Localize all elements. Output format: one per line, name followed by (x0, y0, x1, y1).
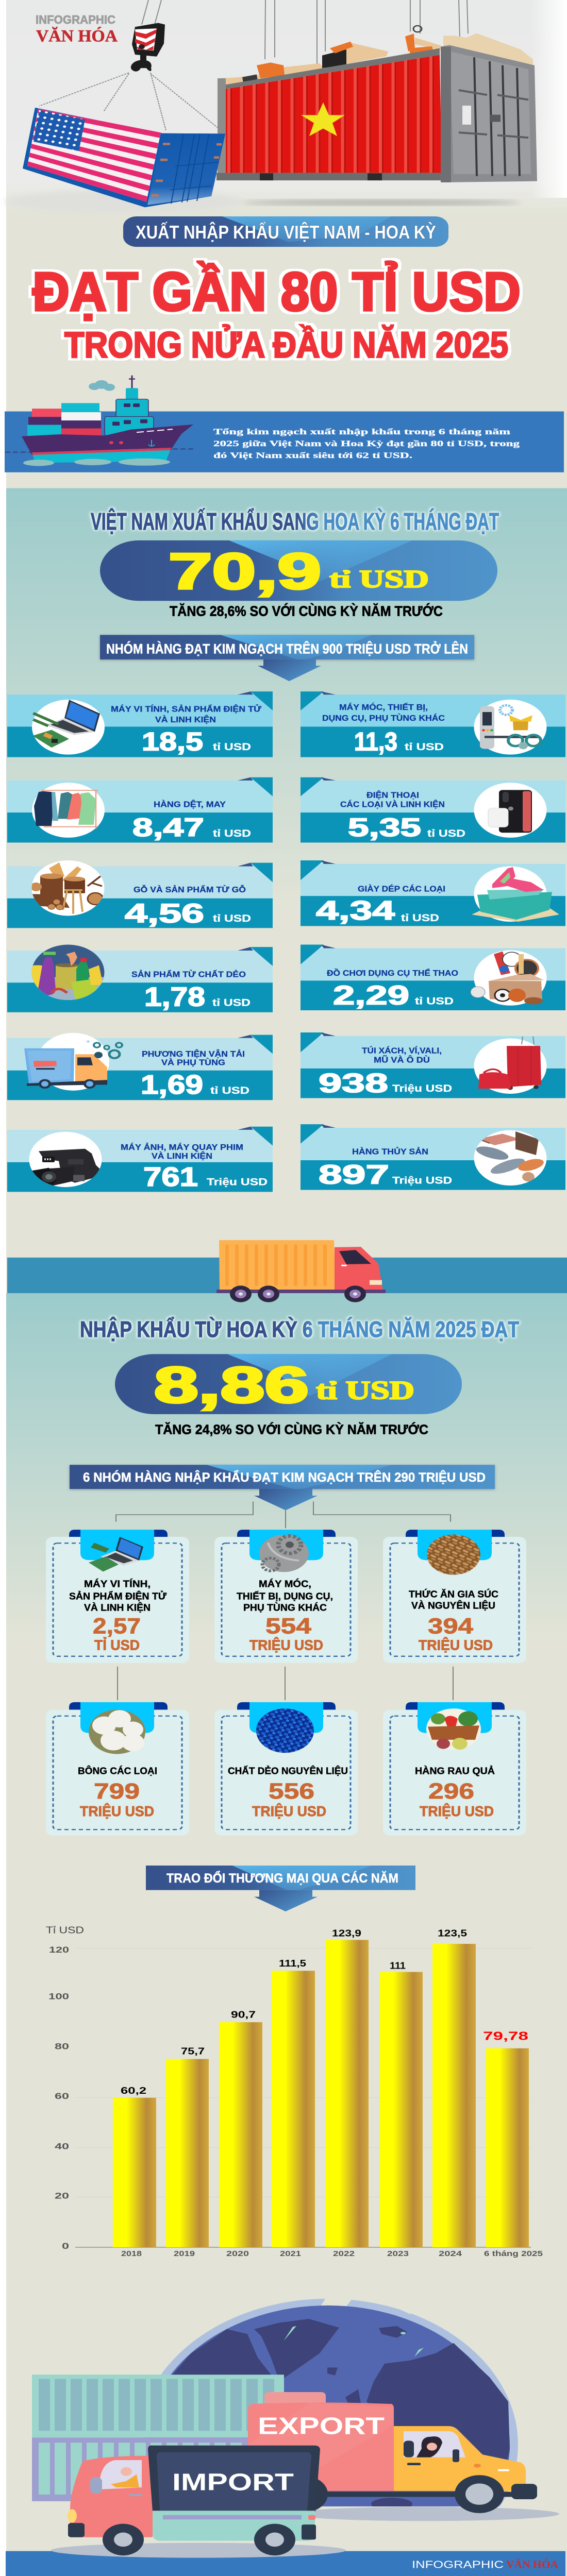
icon: feed pellets (427, 1534, 480, 1575)
callout: 70,9 tỉ USD: 70,9 (169, 544, 321, 600)
value: tỉ USD (210, 1085, 249, 1096)
label: HÀNG RAU QUẢ (415, 1765, 495, 1776)
icon: clothes rack (34, 790, 98, 829)
label: MÁY ẢNH, MÁY QUAY PHIM (121, 1142, 243, 1151)
y axis labels: 120 (49, 1945, 69, 1955)
bar values: 75,7 (181, 2046, 205, 2057)
bars (113, 1940, 529, 2247)
label: MÁY MÓC, THIẾT BỊ, (339, 703, 428, 712)
card: wood (7, 860, 273, 928)
value: 799 (94, 1778, 140, 1804)
label: THỨC ĂN GIA SÚC (409, 1588, 498, 1600)
card: phones (301, 777, 565, 842)
illustration: import truck (51, 2446, 346, 2558)
value: Triệu USD (392, 1175, 452, 1186)
value (252, 1778, 326, 1819)
x axis labels: 6 tháng 2025 (484, 2249, 543, 2258)
x axis labels: 2019 (174, 2249, 195, 2258)
bar values: 111,5 (279, 1958, 306, 1969)
x axis labels: 2023 (387, 2249, 409, 2258)
footer band (6, 2551, 565, 2576)
x axis labels: 2020 (226, 2249, 249, 2258)
banner: trade over the years (146, 1866, 415, 1911)
value (144, 981, 251, 1012)
bar values: 60,2 (121, 2086, 146, 2096)
value: 938 (319, 1068, 388, 1098)
icon: cotton (89, 1709, 145, 1754)
label: THIẾT BỊ, DỤNG CỤ, (237, 1590, 333, 1602)
card: plastics (7, 945, 273, 1012)
growth note: imports: TĂNG 24,8% SO VỚI CÙNG KỲ NĂM TRƯỚC (155, 1422, 428, 1437)
value: TỈ USD (94, 1637, 140, 1653)
label: MÁY MÓC, (259, 1578, 311, 1589)
connector lines (116, 1502, 453, 1700)
import card: machinery (214, 1530, 358, 1663)
value: tỉ USD (401, 912, 439, 924)
value: 394 (428, 1614, 473, 1638)
label: PHỤ TÙNG KHÁC (243, 1602, 327, 1613)
x axis labels (121, 2249, 543, 2258)
intro banner (5, 412, 564, 472)
value (132, 814, 251, 842)
label: TÚI XÁCH, VÍ,VALI, (362, 1046, 442, 1055)
card: textiles (7, 777, 273, 842)
intro text: đó Việt Nam xuất siêu tới 62 tỉ USD. (213, 451, 412, 460)
illustration: import truck: IMPORT (172, 2469, 294, 2496)
label (121, 1142, 243, 1160)
label: GIÀY DÉP CÁC LOẠI (358, 884, 445, 893)
growth note: exports: TĂNG 28,6% SO VỚI CÙNG KỲ NĂM TRƯỚC (170, 603, 443, 619)
label: VÀ NGUYÊN LIỆU (411, 1600, 495, 1611)
icon: cargo truck (216, 1240, 386, 1302)
icon: wood logs (30, 862, 103, 914)
value: tỉ USD (213, 741, 251, 752)
value: tỉ USD (213, 913, 251, 924)
label (340, 790, 445, 809)
label (409, 1588, 498, 1611)
intro text: 2025 giữa Việt Nam và Hoa Kỳ đạt gần 80 tỉ USD, trong (213, 439, 520, 448)
value (125, 898, 251, 928)
value: 4,56 (125, 898, 204, 928)
label (111, 704, 261, 724)
label: MÁY VI TÍNH, SẢN PHẨM ĐIỆN TỬ (111, 704, 261, 714)
icon: plastic bottles (31, 945, 106, 1001)
value (80, 1778, 154, 1819)
value: tỉ USD (427, 828, 465, 839)
y axis labels: 80 (55, 2042, 69, 2052)
bar values: 123,9 (332, 1928, 361, 1939)
label (362, 1046, 442, 1064)
value: Triệu USD (207, 1176, 268, 1188)
value: 556 (269, 1778, 314, 1804)
value (319, 1068, 452, 1098)
label: CÁC LOẠI VÀ LINH KIỆN (340, 800, 445, 809)
label: VÀ PHỤ TÙNG (161, 1058, 225, 1067)
value (348, 814, 465, 842)
value: TRIỆU USD (80, 1803, 154, 1819)
bar chart (46, 1925, 543, 2258)
value: TRIỆU USD (252, 1803, 326, 1819)
label: HÀNG THỦY SẢN (352, 1147, 428, 1156)
illustration: container stack (32, 2375, 284, 2501)
bar chart: Tỉ USD (46, 1925, 84, 1936)
card: toys and sports (301, 945, 565, 1010)
label (237, 1578, 333, 1613)
bar values: 111 (390, 1960, 406, 1971)
value (143, 1162, 268, 1192)
value (142, 728, 251, 756)
callout: 70,9 tỉ USD: tỉ USD (329, 565, 429, 593)
value: 18,5 (142, 728, 203, 756)
Vietnam flag container (216, 26, 537, 182)
label: CHẤT DẺO NGUYÊN LIỆU (228, 1765, 348, 1776)
icon: laptop and circuit board (32, 700, 100, 748)
spreader frame on top (219, 26, 533, 84)
banner: import groups (70, 1465, 495, 1511)
icon: plastic granules (256, 1708, 314, 1753)
bar values (121, 1928, 528, 2096)
value: TRIỆU USD (420, 1803, 494, 1819)
label: VÀ LINH KIỆN (84, 1602, 151, 1613)
card: cameras (7, 1127, 273, 1192)
import card: plastic materials (214, 1702, 358, 1836)
arrow (258, 659, 321, 681)
value: 897 (319, 1159, 389, 1189)
lifting chains (39, 73, 224, 132)
value: TRIỆU USD (249, 1637, 323, 1653)
icon: suitcase and handbag (478, 1037, 541, 1090)
arrow (254, 1489, 318, 1511)
value (141, 1070, 249, 1099)
value: 8,47 (132, 814, 204, 842)
label: SẢN PHẨM TỪ CHẤT DẺO (131, 970, 246, 979)
icon: laptop (89, 1537, 143, 1572)
value: 5,35 (348, 814, 421, 842)
value (316, 895, 439, 925)
label (322, 703, 445, 722)
panel: exports section background (6, 488, 567, 911)
y axis labels: 0 (62, 2241, 69, 2251)
bar values: 90,7 (231, 2009, 256, 2020)
y axis labels (48, 1945, 69, 2251)
import card: animal feed (383, 1530, 526, 1663)
label: MÁY VI TÍNH, (84, 1578, 151, 1589)
intro text (213, 427, 520, 460)
callout: 8,86 tỉ USD (115, 1354, 462, 1414)
icon: video camera (32, 1149, 100, 1185)
label: ĐIỆN THOẠI (366, 790, 419, 800)
value: Triệu USD (392, 1083, 452, 1094)
import card: computers (46, 1530, 189, 1663)
label: VÀ LINH KIỆN (152, 1151, 212, 1160)
icon: machinery (480, 705, 541, 749)
footer band: INFOGRAPHIC (412, 2559, 504, 2571)
label: MŨ VÀ Ô DÙ (374, 1055, 430, 1064)
label: ĐỒ CHƠI DỤNG CỤ THỂ THAO (327, 969, 458, 978)
callout: 8,86 tỉ USD: 8,86 (154, 1357, 309, 1413)
y axis labels: 20 (55, 2191, 69, 2201)
icon: sports equipment box (471, 952, 544, 1004)
icon: shoes on box (472, 867, 559, 922)
icon: cargo ship (5, 376, 193, 466)
value: 1,69 (141, 1070, 203, 1099)
value: 2,29 (333, 980, 409, 1010)
value (333, 980, 454, 1010)
icon: vegetable basket (426, 1708, 481, 1750)
intro text: Tổng kim ngạch xuất nhập khẩu trong 6 tháng năm (213, 427, 510, 436)
label: SẢN PHẨM ĐIỆN TỬ (69, 1590, 166, 1602)
value: tỉ USD (415, 995, 454, 1007)
card: footwear (301, 860, 565, 926)
brand logo: VĂN HÓA (36, 27, 118, 45)
value: 296 (428, 1778, 474, 1804)
value: tỉ USD (405, 741, 444, 752)
value: tỉ USD (212, 997, 251, 1008)
x axis labels: 2024 (439, 2249, 462, 2258)
card: computers (7, 691, 273, 757)
icon: seafood (474, 1131, 546, 1181)
icon: delivery truck with gears (24, 1040, 122, 1089)
value (419, 1614, 493, 1653)
hero illustration: shipping containers (5, 0, 567, 214)
value: 4,34 (316, 895, 395, 925)
brand logo: INFOGRAPHIC (36, 13, 115, 26)
card: seafood (301, 1124, 565, 1190)
subtitle pill (123, 216, 448, 247)
label: VÀ LINH KIỆN (155, 715, 216, 724)
x axis labels: 2022 (333, 2249, 355, 2258)
value: 1,78 (144, 981, 205, 1012)
value (420, 1778, 494, 1819)
value: 2,57 (93, 1614, 141, 1638)
label: GỖ VÀ SẢN PHẨM TỪ GỖ (134, 885, 246, 894)
panel: imports section background (6, 1258, 567, 1641)
import card: cotton (46, 1702, 189, 1836)
banner: trade over the years: TRAO ĐỔI THƯƠNG MẠI QUA CÁC NĂM (166, 1871, 398, 1886)
bar values: 123,5 (438, 1928, 467, 1939)
label: BÔNG CÁC LOẠI (78, 1765, 157, 1776)
main title (32, 262, 521, 365)
illustration: globe (138, 2299, 518, 2506)
label (142, 1049, 245, 1067)
value (319, 1159, 452, 1189)
USA flag container (23, 108, 225, 207)
icon: phone and earbuds (488, 790, 532, 833)
arrow (254, 1890, 318, 1911)
y axis labels: 60 (55, 2091, 69, 2101)
card: machinery (301, 691, 565, 757)
label: PHƯƠNG TIỆN VẬN TẢI (142, 1049, 245, 1058)
crane hook (131, 23, 165, 72)
card: bags (301, 1032, 565, 1098)
icon: gears (259, 1535, 309, 1572)
callout: 70,9 tỉ USD (100, 540, 497, 601)
x axis labels: 2018 (121, 2249, 142, 2258)
value: TRIỆU USD (419, 1637, 493, 1653)
illustration: export truck: EXPORT (258, 2413, 385, 2439)
value: tỉ USD (213, 828, 251, 839)
label: HÀNG DỆT, MAY (154, 800, 226, 809)
crane cables (142, 0, 468, 65)
value (93, 1614, 141, 1653)
banner: export groups (100, 635, 474, 681)
value: 761 (143, 1162, 198, 1192)
value (249, 1614, 323, 1653)
bar values: 79,78 (483, 2029, 528, 2043)
illustration: export truck (248, 2392, 559, 2521)
value: 11,3 (354, 728, 397, 756)
label (69, 1578, 166, 1613)
y axis labels: 100 (48, 1992, 69, 2002)
callout: 8,86 tỉ USD: tỉ USD (316, 1376, 414, 1405)
brand logo (36, 13, 118, 45)
card: vehicles (7, 1033, 273, 1100)
x axis labels: 2021 (280, 2249, 301, 2258)
label: DỤNG CỤ, PHỤ TÙNG KHÁC (322, 713, 445, 722)
y axis labels: 40 (55, 2142, 69, 2151)
import card: vegetables (383, 1702, 526, 1836)
value: 554 (265, 1614, 311, 1638)
